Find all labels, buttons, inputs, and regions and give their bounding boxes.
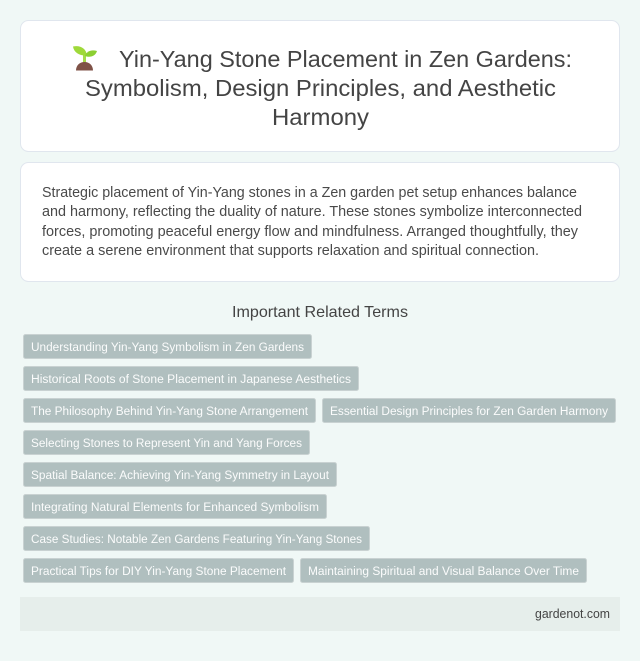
tag list xyxy=(24,334,616,582)
panel: title card xyxy=(20,20,620,152)
tag xyxy=(24,398,316,422)
tag xyxy=(24,558,294,582)
tag xyxy=(24,526,370,550)
tag xyxy=(322,398,616,422)
icon: seedling xyxy=(73,46,97,70)
heading: related terms: Important Related Terms xyxy=(232,304,408,321)
tag: Practical Tips for DIY Yin-Yang Stone Placement xyxy=(31,564,287,578)
text block: description: forces, promoting peaceful energy flow and mindfulness. Arranged thoughtfully, they xyxy=(42,224,579,240)
text block: description: create a serene environment that supports relaxation and spiritual connection. xyxy=(42,243,539,259)
tag: Case Studies: Notable Zen Gardens Featuring Yin-Yang Stones xyxy=(31,532,362,546)
tag: Integrating Natural Elements for Enhanced Symbolism xyxy=(31,500,319,514)
title: Yin-Yang Stone Placement in Zen Gardens: xyxy=(119,46,572,72)
tag: Spatial Balance: Achieving Yin-Yang Symmetry in Layout xyxy=(31,468,330,482)
tag: Essential Design Principles for Zen Garden Harmony xyxy=(330,404,609,418)
text block: description: and harmony, reflecting the duality of nature. These stones symbolize interconnected xyxy=(42,204,582,220)
footer: source: gardenot.com xyxy=(535,607,610,621)
tag: Selecting Stones to Represent Yin and Yang Forces xyxy=(31,436,302,450)
tag: Maintaining Spiritual and Visual Balance Over Time xyxy=(308,564,579,578)
tag xyxy=(24,334,312,358)
tag xyxy=(24,494,326,518)
tag xyxy=(24,430,310,454)
text block: description: Strategic placement of Yin-Yang stones in a Zen garden pet setup enhances balance xyxy=(42,185,577,201)
tag xyxy=(24,462,336,486)
tag: The Philosophy Behind Yin-Yang Stone Arrangement xyxy=(31,404,309,418)
title: Harmony xyxy=(272,104,369,130)
title: Symbolism, Design Principles, and Aesthetic xyxy=(85,75,556,101)
panel: description xyxy=(20,162,620,282)
tag: Understanding Yin-Yang Symbolism in Zen Gardens xyxy=(31,340,304,354)
tag xyxy=(24,366,358,390)
tag xyxy=(300,558,586,582)
footer xyxy=(20,597,620,631)
tag: Historical Roots of Stone Placement in Japanese Aesthetics xyxy=(31,372,351,386)
